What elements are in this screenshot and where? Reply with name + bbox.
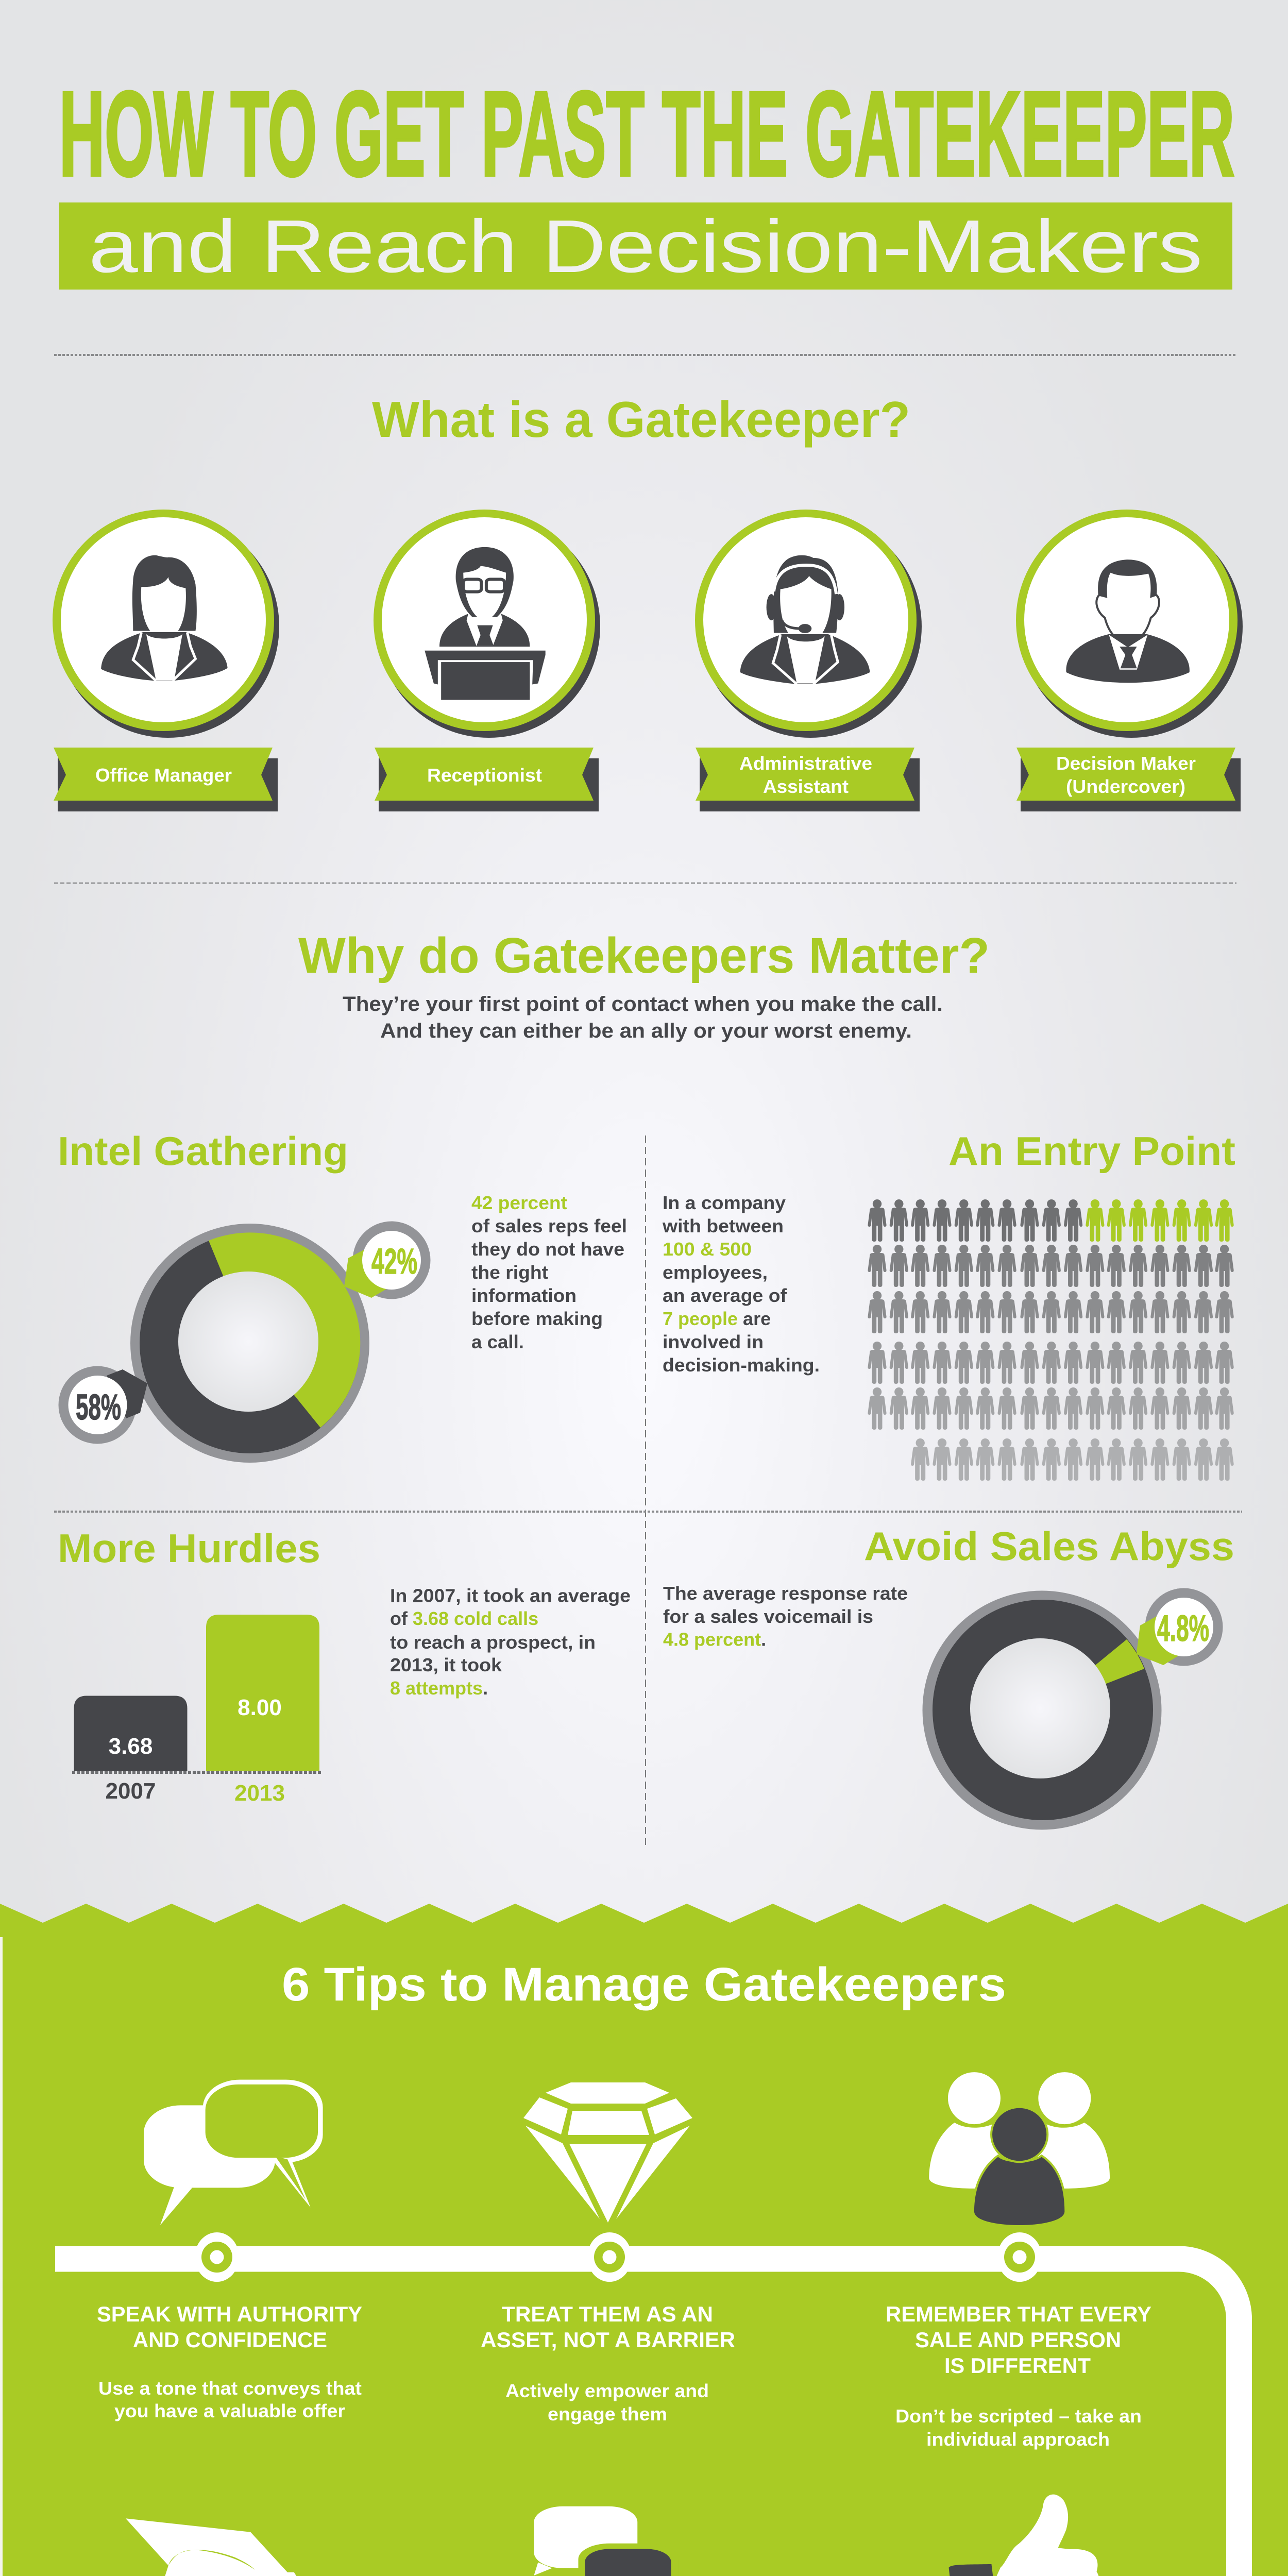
pictogram: 100 people, 7 highlighted xyxy=(868,1199,1234,1481)
tip 3 text xyxy=(886,2302,1151,2450)
intro text: And they can either be an ally or your worst enemy. xyxy=(380,1020,912,1042)
tip 3 text: individual approach xyxy=(926,2429,1110,2450)
stat text: 2013, it took xyxy=(390,1654,502,1675)
icon: receptionist with laptop xyxy=(425,547,546,700)
callout: 42% xyxy=(344,1221,431,1299)
stat text: information xyxy=(471,1285,577,1306)
stat text: 8 attempts. xyxy=(390,1677,488,1699)
stat text: involved in xyxy=(663,1331,764,1352)
stat text xyxy=(662,1192,820,1376)
donut chart 42 / 58 xyxy=(130,1224,369,1463)
icon: thumbs up xyxy=(949,2495,1099,2576)
stat text: of 3.68 cold calls xyxy=(390,1608,538,1629)
callout: 58%: 58% xyxy=(76,1387,121,1427)
callout: 42%: 42% xyxy=(371,1241,417,1281)
bar chart: 2013 xyxy=(234,1781,285,1806)
bar chart: 8.00 xyxy=(238,1695,282,1720)
stat text: they do not have xyxy=(471,1239,624,1260)
stat text xyxy=(390,1585,631,1699)
role: administrative assistant: Assistant xyxy=(763,776,849,797)
stat text: a call. xyxy=(471,1331,524,1352)
bar chart: 3.68 xyxy=(109,1734,152,1759)
icon: woman with headset xyxy=(740,555,870,684)
role: receptionist: Receptionist xyxy=(427,765,542,786)
heading: An Entry Point xyxy=(948,1128,1235,1174)
tip 3 text: Don’t be scripted – take an xyxy=(895,2405,1142,2427)
stat text: before making xyxy=(471,1308,603,1329)
stat text: decision-making. xyxy=(663,1354,820,1376)
heading: 6 tips: 6 Tips to Manage Gatekeepers xyxy=(282,1958,1006,2011)
stat text: In 2007, it took an average xyxy=(390,1585,631,1606)
role: office manager: Office Manager xyxy=(95,765,232,786)
banner xyxy=(54,748,273,801)
stat text: 42 percent xyxy=(471,1192,567,1213)
tip 2 text: TREAT THEM AS AN xyxy=(502,2302,713,2326)
tip 3 text: IS DIFFERENT xyxy=(944,2353,1091,2378)
icon: diamond xyxy=(523,2082,692,2223)
role: administrative assistant xyxy=(695,510,922,811)
panel: an entry point xyxy=(662,1128,1235,1481)
tip 2 text: ASSET, NOT A BARRIER xyxy=(481,2328,735,2352)
role: office manager xyxy=(53,510,279,811)
tip 3 text: SALE AND PERSON xyxy=(915,2328,1121,2352)
icon: speech bubbles xyxy=(144,2080,323,2225)
page background xyxy=(0,0,1288,1937)
heading: More Hurdles xyxy=(58,1526,320,1571)
stat text: 7 people are xyxy=(663,1308,771,1329)
donut chart 4.8 xyxy=(922,1591,1161,1830)
stat text: The average response rate xyxy=(663,1583,908,1604)
callout: 4.8%: 4.8% xyxy=(1157,1608,1209,1649)
heading: what is a gatekeeper: What is a Gatekeeper? xyxy=(372,391,910,448)
stat text: 100 & 500 xyxy=(663,1239,752,1260)
banner xyxy=(1016,748,1235,801)
stat text: the right xyxy=(471,1262,548,1283)
tip 2 text: Actively empower and xyxy=(505,2380,709,2401)
role: receptionist xyxy=(374,510,600,811)
tip 1 text: Use a tone that conveys that xyxy=(98,2378,362,2399)
tip 2 text: engage them xyxy=(548,2403,667,2425)
timeline path xyxy=(55,2232,1239,2576)
stat text: In a company xyxy=(663,1192,786,1213)
banner shadow xyxy=(58,758,278,811)
icon: man in suit xyxy=(1066,560,1190,683)
callout: 58% xyxy=(59,1366,147,1444)
bar chart: 2007 xyxy=(106,1778,156,1804)
icon: group of people xyxy=(929,2072,1110,2225)
banner shadow xyxy=(1021,758,1241,811)
callout: 4.8% xyxy=(1137,1588,1223,1666)
tip 1 text: AND CONFIDENCE xyxy=(133,2328,327,2352)
banner xyxy=(375,748,594,801)
role: decision maker xyxy=(1016,510,1243,811)
stat text xyxy=(663,1583,908,1650)
role: decision maker: (Undercover) xyxy=(1066,776,1185,797)
icon: two people talking xyxy=(493,2506,742,2576)
panel: gatekeeper roles xyxy=(53,510,1243,811)
role: decision maker: Decision Maker xyxy=(1056,753,1196,774)
subtitle banner: and Reach Decision-Makers xyxy=(89,205,1202,288)
role: administrative assistant: Administrative xyxy=(739,753,872,774)
tip 3 text: REMEMBER THAT EVERY xyxy=(886,2302,1151,2326)
stat text: 4.8 percent. xyxy=(663,1629,766,1650)
tip 1 text xyxy=(97,2302,362,2421)
banner xyxy=(696,748,914,801)
panel: intel gathering xyxy=(58,1128,627,1463)
stat text: for a sales voicemail is xyxy=(663,1606,873,1627)
tip 2 text xyxy=(481,2302,735,2425)
heading: why do gatekeepers matter: Why do Gatekeepers Matter? xyxy=(298,927,990,984)
banner shadow xyxy=(379,758,599,811)
heading: Avoid Sales Abyss xyxy=(864,1523,1234,1569)
icon: graduation cap xyxy=(126,2518,312,2576)
banner shadow xyxy=(700,758,920,811)
stat text: to reach a prospect, in xyxy=(390,1632,596,1653)
panel: more hurdles xyxy=(58,1526,631,1806)
stat text: employees, xyxy=(663,1262,768,1283)
panel: green tips background with zigzag edges xyxy=(0,1904,1288,2576)
stat text xyxy=(471,1192,627,1352)
tip 1 text: SPEAK WITH AUTHORITY xyxy=(97,2302,362,2326)
intro text: They’re your first point of contact when you make the call. xyxy=(343,993,943,1015)
intro text xyxy=(343,993,943,1042)
tip 1 text: you have a valuable offer xyxy=(114,2400,345,2421)
icon: woman xyxy=(101,555,228,681)
stat text: an average of xyxy=(663,1285,787,1306)
bar chart xyxy=(72,1615,322,1806)
heading: Intel Gathering xyxy=(58,1128,348,1174)
stat text: with between xyxy=(662,1215,784,1236)
panel: avoid sales abyss xyxy=(663,1523,1234,1830)
stat text: of sales reps feel xyxy=(471,1215,627,1236)
